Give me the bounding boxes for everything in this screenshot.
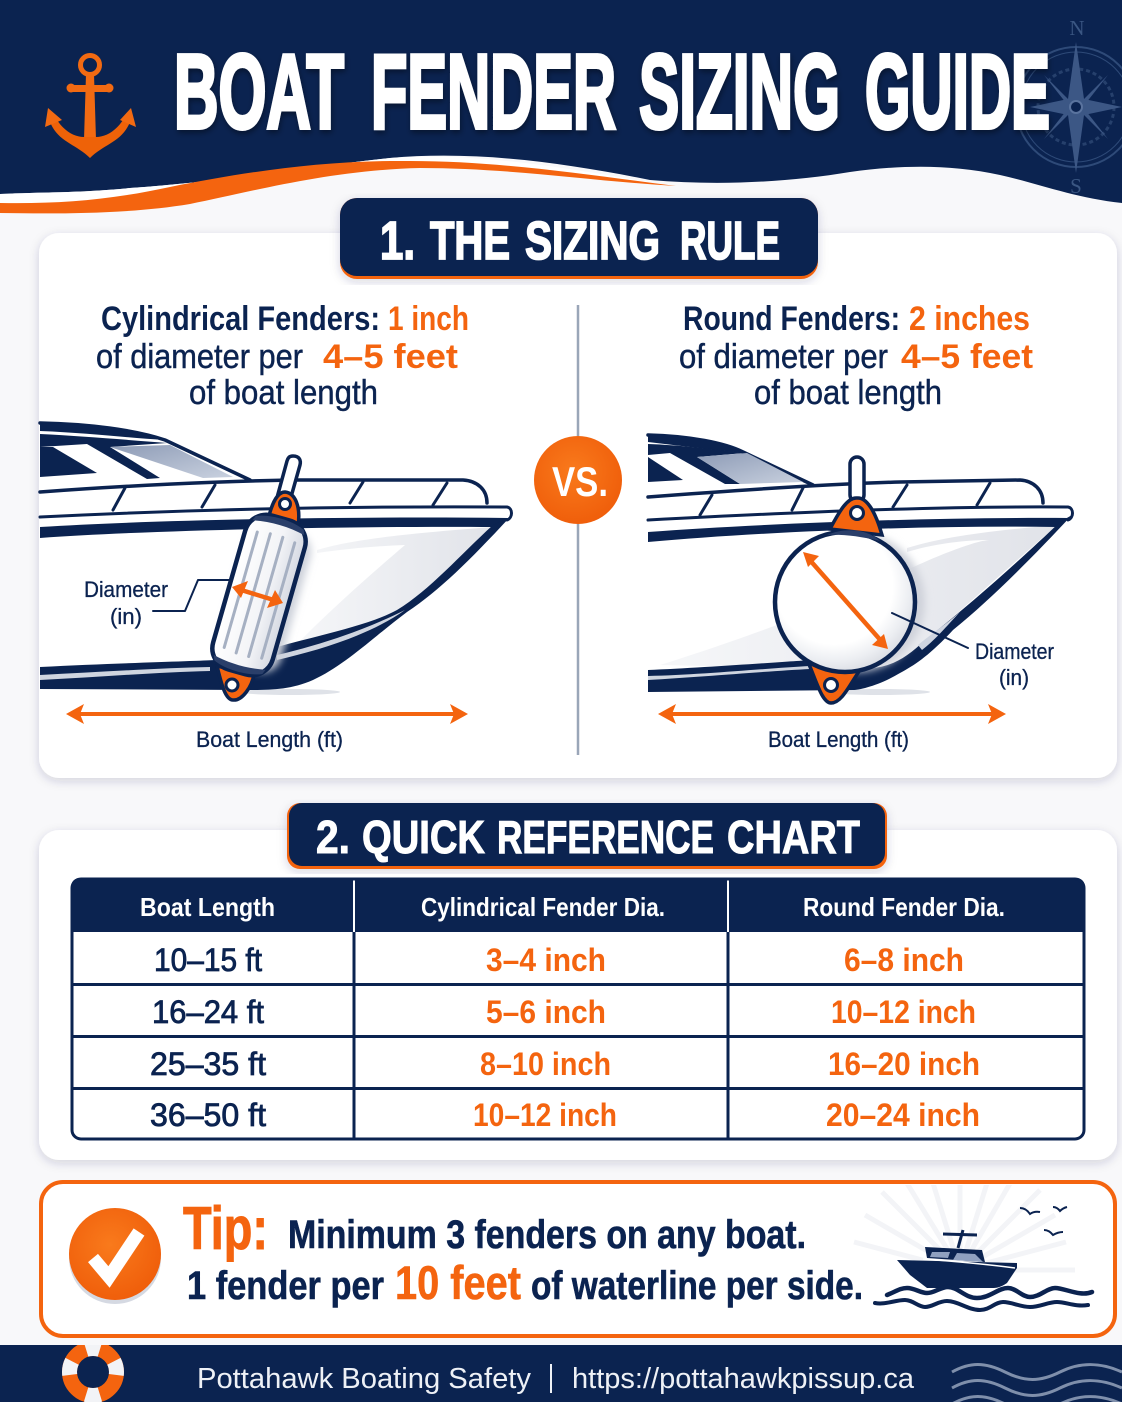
diameter label with leader: Diameter [975,639,1054,664]
footer text [197,1363,915,1395]
arrow: boat length: Boat Length (ft) [196,727,343,752]
title: FENDER [371,33,616,151]
table header: Boat Length [140,892,275,922]
illustration: boat with cylindrical fender [40,423,512,752]
table grid [72,879,1084,1139]
tip text: 10 feet [395,1256,521,1309]
panel: the sizing rule [39,198,1117,778]
compass south label: S [1070,174,1082,198]
row: 36-50 ft: 10–12 inch [473,1097,617,1133]
heading badge: 2. quick reference chart: QUICK [362,811,485,863]
row: 10-15 ft: 10–15 ft [154,942,262,978]
heading badge: 2. quick reference chart: CHART [727,811,860,863]
diameter label with leader: (in) [110,604,142,629]
arrow: boat length: Boat Length (ft) [768,727,909,752]
text: cylindrical rule: 1 inch [388,300,469,338]
row: 25-35 ft [150,1046,980,1082]
tip text: of waterline per side. [531,1264,863,1308]
footer text: Pottahawk Boating Safety [197,1363,531,1395]
compass north label: N [1069,16,1085,40]
icon: check badge [69,1208,161,1304]
arrow: boat length [66,704,468,752]
illustration: boat with round fender [648,435,1072,752]
heading badge: 1. the sizing rule: SIZING [525,211,660,271]
divider with vs badge [534,305,622,755]
row: 16-24 ft: 5–6 inch [486,994,606,1030]
divider with vs badge: VS. [552,458,608,505]
table header: Round Fender Dia. [803,892,1005,922]
row: 25-35 ft: 8–10 inch [480,1046,611,1082]
hull shading [293,527,493,648]
text: round rule [679,300,1033,412]
tip text [183,1195,863,1309]
table header [71,878,1085,932]
arrow: fender diameter [803,552,888,649]
diameter label with leader: Diameter [84,577,168,602]
text: round rule: 2 inches [909,300,1030,338]
heading badge: 1. the sizing rule [340,198,818,279]
row: 10-15 ft: 3–4 inch [486,942,606,978]
heading badge: 1. the sizing rule: 1. [380,211,415,271]
row: 36-50 ft: 20–24 inch [826,1097,980,1133]
icon: anchor [45,56,136,158]
cabin [40,423,250,480]
arrow: fender diameter [232,581,283,608]
fender: cylindrical [207,456,316,700]
row: 16-24 ft [152,994,976,1030]
title: SIZING [639,33,840,151]
heading badge: 1. the sizing rule: THE [430,211,510,271]
footer bar [0,1345,1122,1402]
row: 36-50 ft [150,1097,980,1133]
text: round rule: Round Fenders: [683,300,900,338]
heading badge: 2. quick reference chart: REFERENCE [497,811,714,863]
hull band and keel [40,517,508,538]
text: cylindrical rule [96,300,469,412]
diameter label with leader [892,613,1054,690]
heading badge: 2. quick reference chart [287,803,887,869]
tip text: Tip: [183,1195,268,1262]
title: BOAT [174,33,344,151]
icon: compass rose [1016,16,1122,198]
heading badge: 2. quick reference chart: 2. [316,811,350,863]
diameter label with leader [84,577,232,629]
row: 16-24 ft: 16–24 ft [152,994,264,1030]
row: 10-15 ft [154,942,964,978]
text: cylindrical rule: of boat length [189,374,378,412]
text: cylindrical rule: Cylindrical Fenders: [101,300,380,338]
icon: life ring [70,1348,116,1396]
hull shading [660,525,1057,670]
text: round rule: of diameter per [679,338,888,376]
icon: boat on waves [854,1180,1092,1310]
heading badge: 1. the sizing rule: RULE [680,211,780,271]
cabin [648,435,813,485]
panel: tip callout [41,1180,1115,1336]
row: 36-50 ft: 36–50 ft [150,1097,266,1133]
text: round rule: of boat length [754,374,942,412]
panel: quick reference chart [39,803,1117,1160]
row: 16-24 ft: 10–12 inch [831,994,976,1030]
tip text: Minimum 3 fenders on any boat. [288,1213,806,1257]
row: 25-35 ft: 25–35 ft [150,1046,266,1082]
decorative waves icon [952,1364,1122,1402]
title [174,33,1050,151]
arrow: boat length [658,704,1006,752]
tip text: 1 fender per [187,1264,384,1308]
row: 25-35 ft: 16–20 inch [828,1046,980,1082]
header banner [0,0,1122,213]
deck rail [40,480,512,520]
text: cylindrical rule: of diameter per [96,338,303,376]
footer text: https://pottahawkpissup.ca [572,1363,915,1395]
text: cylindrical rule: 4–5 feet [323,338,458,376]
table [71,878,1085,1139]
diameter label with leader: (in) [999,665,1029,690]
row: 10-15 ft: 6–8 inch [844,942,964,978]
fender: round [775,457,925,703]
hull band and keel [648,518,1070,542]
deck rail [648,480,1072,520]
table header: Cylindrical Fender Dia. [421,892,665,922]
text: round rule: 4–5 feet [901,338,1033,376]
